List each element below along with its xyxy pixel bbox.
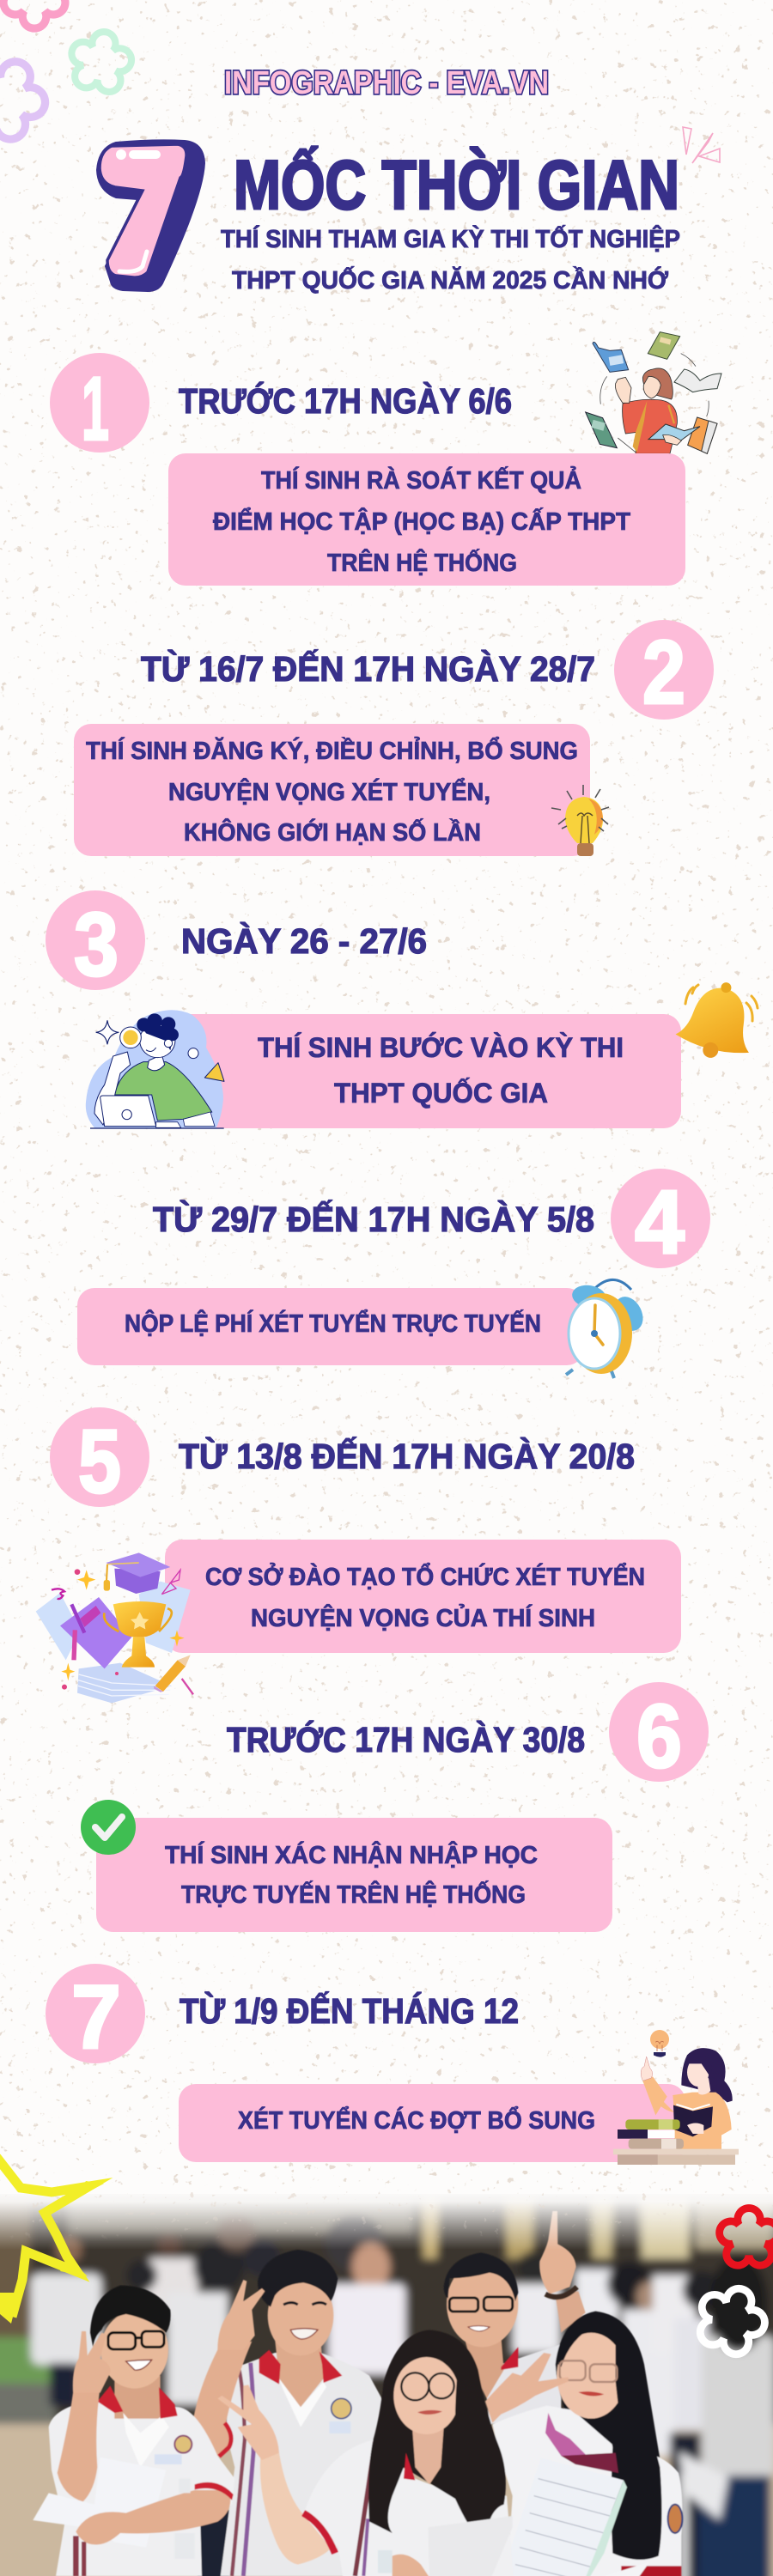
front girl's raised arm <box>260 2453 332 2565</box>
badge 1 <box>50 353 149 459</box>
panel: step 4 <box>77 1169 710 1378</box>
panel: step 1 <box>50 332 721 586</box>
badge 6: 6 <box>636 1686 682 1787</box>
callout text 2: THÍ SINH ĐĂNG KÝ, ĐIỀU CHỈNH, BỔ SUNG <box>86 736 578 765</box>
callout text 2 <box>86 736 578 847</box>
illustration: girl reading with books <box>613 2030 739 2165</box>
panel: step 6 <box>81 1682 709 1932</box>
panel: step 2 <box>74 620 714 856</box>
brand label: INFOGRAPHIC - EVA.VN <box>224 65 549 101</box>
callout text 2: KHÔNG GIỚI HẠN SỐ LẦN <box>184 817 481 847</box>
icon: bell <box>672 974 764 1066</box>
foreground students right <box>303 2211 682 2576</box>
decorative pink sparks <box>683 127 720 163</box>
front girl <box>303 2440 514 2576</box>
panel: step 7 <box>46 1964 739 2165</box>
badge 4 <box>611 1169 710 1273</box>
top fade of photo <box>0 2190 773 2250</box>
pointing boy <box>487 2344 561 2424</box>
callout text 1 <box>213 465 630 577</box>
callout box 7 <box>179 2084 685 2162</box>
title: MỐC THỜI GIAN <box>234 146 679 224</box>
badge 7 <box>46 1964 145 2068</box>
callout text 3 <box>258 1032 624 1109</box>
callout text 6: TRỰC TUYẾN TRÊN HỆ THỐNG <box>181 1880 526 1909</box>
callout text 7: XÉT TUYỂN CÁC ĐỢT BỔ SUNG <box>238 2105 595 2135</box>
badge 4: 4 <box>635 1172 685 1273</box>
date 2: TỪ 16/7 ĐẾN 17H NGÀY 28/7 <box>141 649 595 689</box>
icon: green check <box>81 1800 136 1855</box>
callout text 6: THÍ SINH XÁC NHẬN NHẬP HỌC <box>165 1840 538 1869</box>
icon: alarm clock <box>566 1279 648 1378</box>
date 7: TỪ 1/9 ĐẾN THÁNG 12 <box>180 1991 519 2031</box>
callout box 4 <box>77 1288 584 1365</box>
decorative flowers top-left <box>0 0 136 148</box>
decorative red flower <box>720 2208 773 2265</box>
callout text 5: CƠ SỞ ĐÀO TẠO TỔ CHỨC XÉT TUYỂN <box>205 1562 645 1591</box>
badge 3 <box>46 890 145 995</box>
subtitle: THÍ SINH THAM GIA KỲ THI TỐT NGHIỆP <box>221 224 680 253</box>
foreground students left <box>33 2250 386 2576</box>
badge 7: 7 <box>71 1967 121 2068</box>
photo: students celebrating <box>0 2181 773 2576</box>
callout box 3 <box>172 1014 681 1128</box>
decorative yellow star outline <box>0 2157 104 2324</box>
girl right <box>556 2312 662 2560</box>
date 3: NGÀY 26 - 27/6 <box>181 921 427 961</box>
callout box 6 <box>96 1818 612 1932</box>
panel: step 3 <box>46 890 764 1128</box>
illustration: woman juggling books <box>586 332 721 453</box>
callout text 1: ĐIỂM HỌC TẬP (HỌC BẠ) CẤP THPT <box>213 507 630 536</box>
subtitle: THPT QUỐC GIA NĂM 2025 CẦN NHỚ <box>232 265 668 295</box>
panel: step 5 <box>36 1407 681 1703</box>
big number 7 <box>97 140 204 291</box>
blurred crowd background <box>0 2181 773 2576</box>
badge 2 <box>614 620 714 723</box>
badge 6 <box>609 1682 709 1787</box>
date 4: TỪ 29/7 ĐẾN 17H NGÀY 5/8 <box>153 1200 594 1239</box>
callout box 1 <box>168 453 685 586</box>
callout text 1: THÍ SINH RÀ SOÁT KẾT QUẢ <box>261 465 581 495</box>
badge 3: 3 <box>74 895 119 995</box>
decorative white flower <box>690 2277 773 2361</box>
callout text 5 <box>205 1562 645 1632</box>
boy left: shirt <box>49 2400 234 2576</box>
callout text 5: NGUYỆN VỌNG CỦA THÍ SINH <box>251 1603 595 1632</box>
badge 2: 2 <box>642 623 685 723</box>
subtitle <box>221 224 680 295</box>
callout text 2: NGUYỆN VỌNG XÉT TUYỂN, <box>168 777 490 806</box>
badge 1: 1 <box>82 359 109 459</box>
callout text 4: NỘP LỆ PHÍ XÉT TUYỂN TRỰC TUYẾN <box>125 1309 541 1338</box>
callout box 2 <box>74 724 590 856</box>
date 5: TỪ 13/8 ĐẾN 17H NGÀY 20/8 <box>179 1437 635 1476</box>
date 6: TRƯỚC 17H NGÀY 30/8 <box>227 1720 585 1759</box>
illustration: student with magnifier <box>86 1010 224 1128</box>
boy right: shirt <box>221 2353 386 2576</box>
illustration: trophy, books and graduation cap <box>36 1552 193 1703</box>
callout text 6 <box>165 1840 538 1909</box>
callout text 3: THÍ SINH BƯỚC VÀO KỲ THI <box>258 1032 624 1063</box>
callout text 1: TRÊN HỆ THỐNG <box>327 548 517 577</box>
callout text 3: THPT QUỐC GIA <box>334 1078 548 1109</box>
badge 5 <box>50 1407 149 1512</box>
callout box 5 <box>165 1540 681 1653</box>
dark trousers between <box>198 2510 229 2576</box>
badge 5: 5 <box>78 1412 121 1512</box>
date 1: TRƯỚC 17H NGÀY 6/6 <box>179 381 512 421</box>
icon: light bulb <box>551 785 609 856</box>
